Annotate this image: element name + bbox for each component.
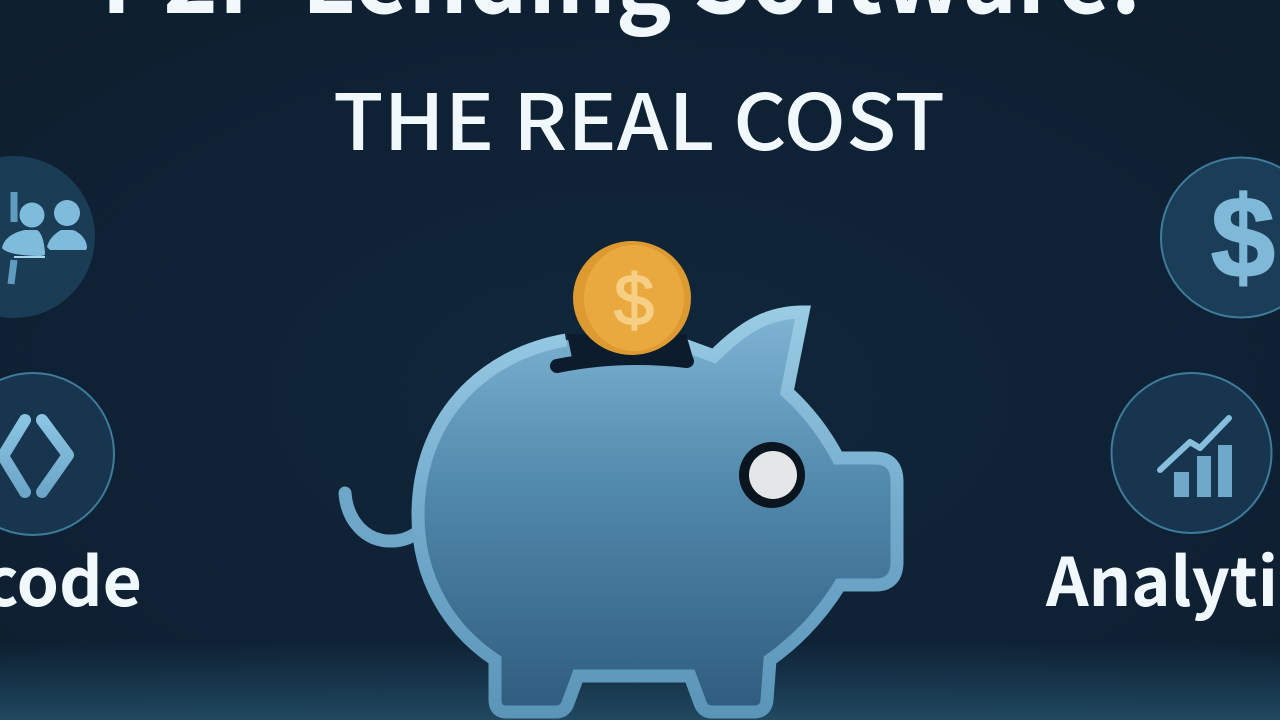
icon: code <box>0 373 114 535</box>
piggy bank <box>345 241 897 712</box>
icon: analytics <box>1112 373 1272 533</box>
pig body <box>418 312 897 712</box>
floor glow <box>0 640 1280 720</box>
subtitle: THE REAL COST <box>333 62 945 173</box>
pig eye <box>739 442 805 508</box>
coin slot <box>557 334 693 366</box>
coin dollar sign: $ <box>614 261 654 341</box>
icon: dollar: $ <box>1211 174 1275 302</box>
coin <box>573 241 691 355</box>
icon: dollar <box>1161 158 1280 318</box>
icon: users <box>0 156 95 318</box>
pig tail <box>345 493 418 541</box>
